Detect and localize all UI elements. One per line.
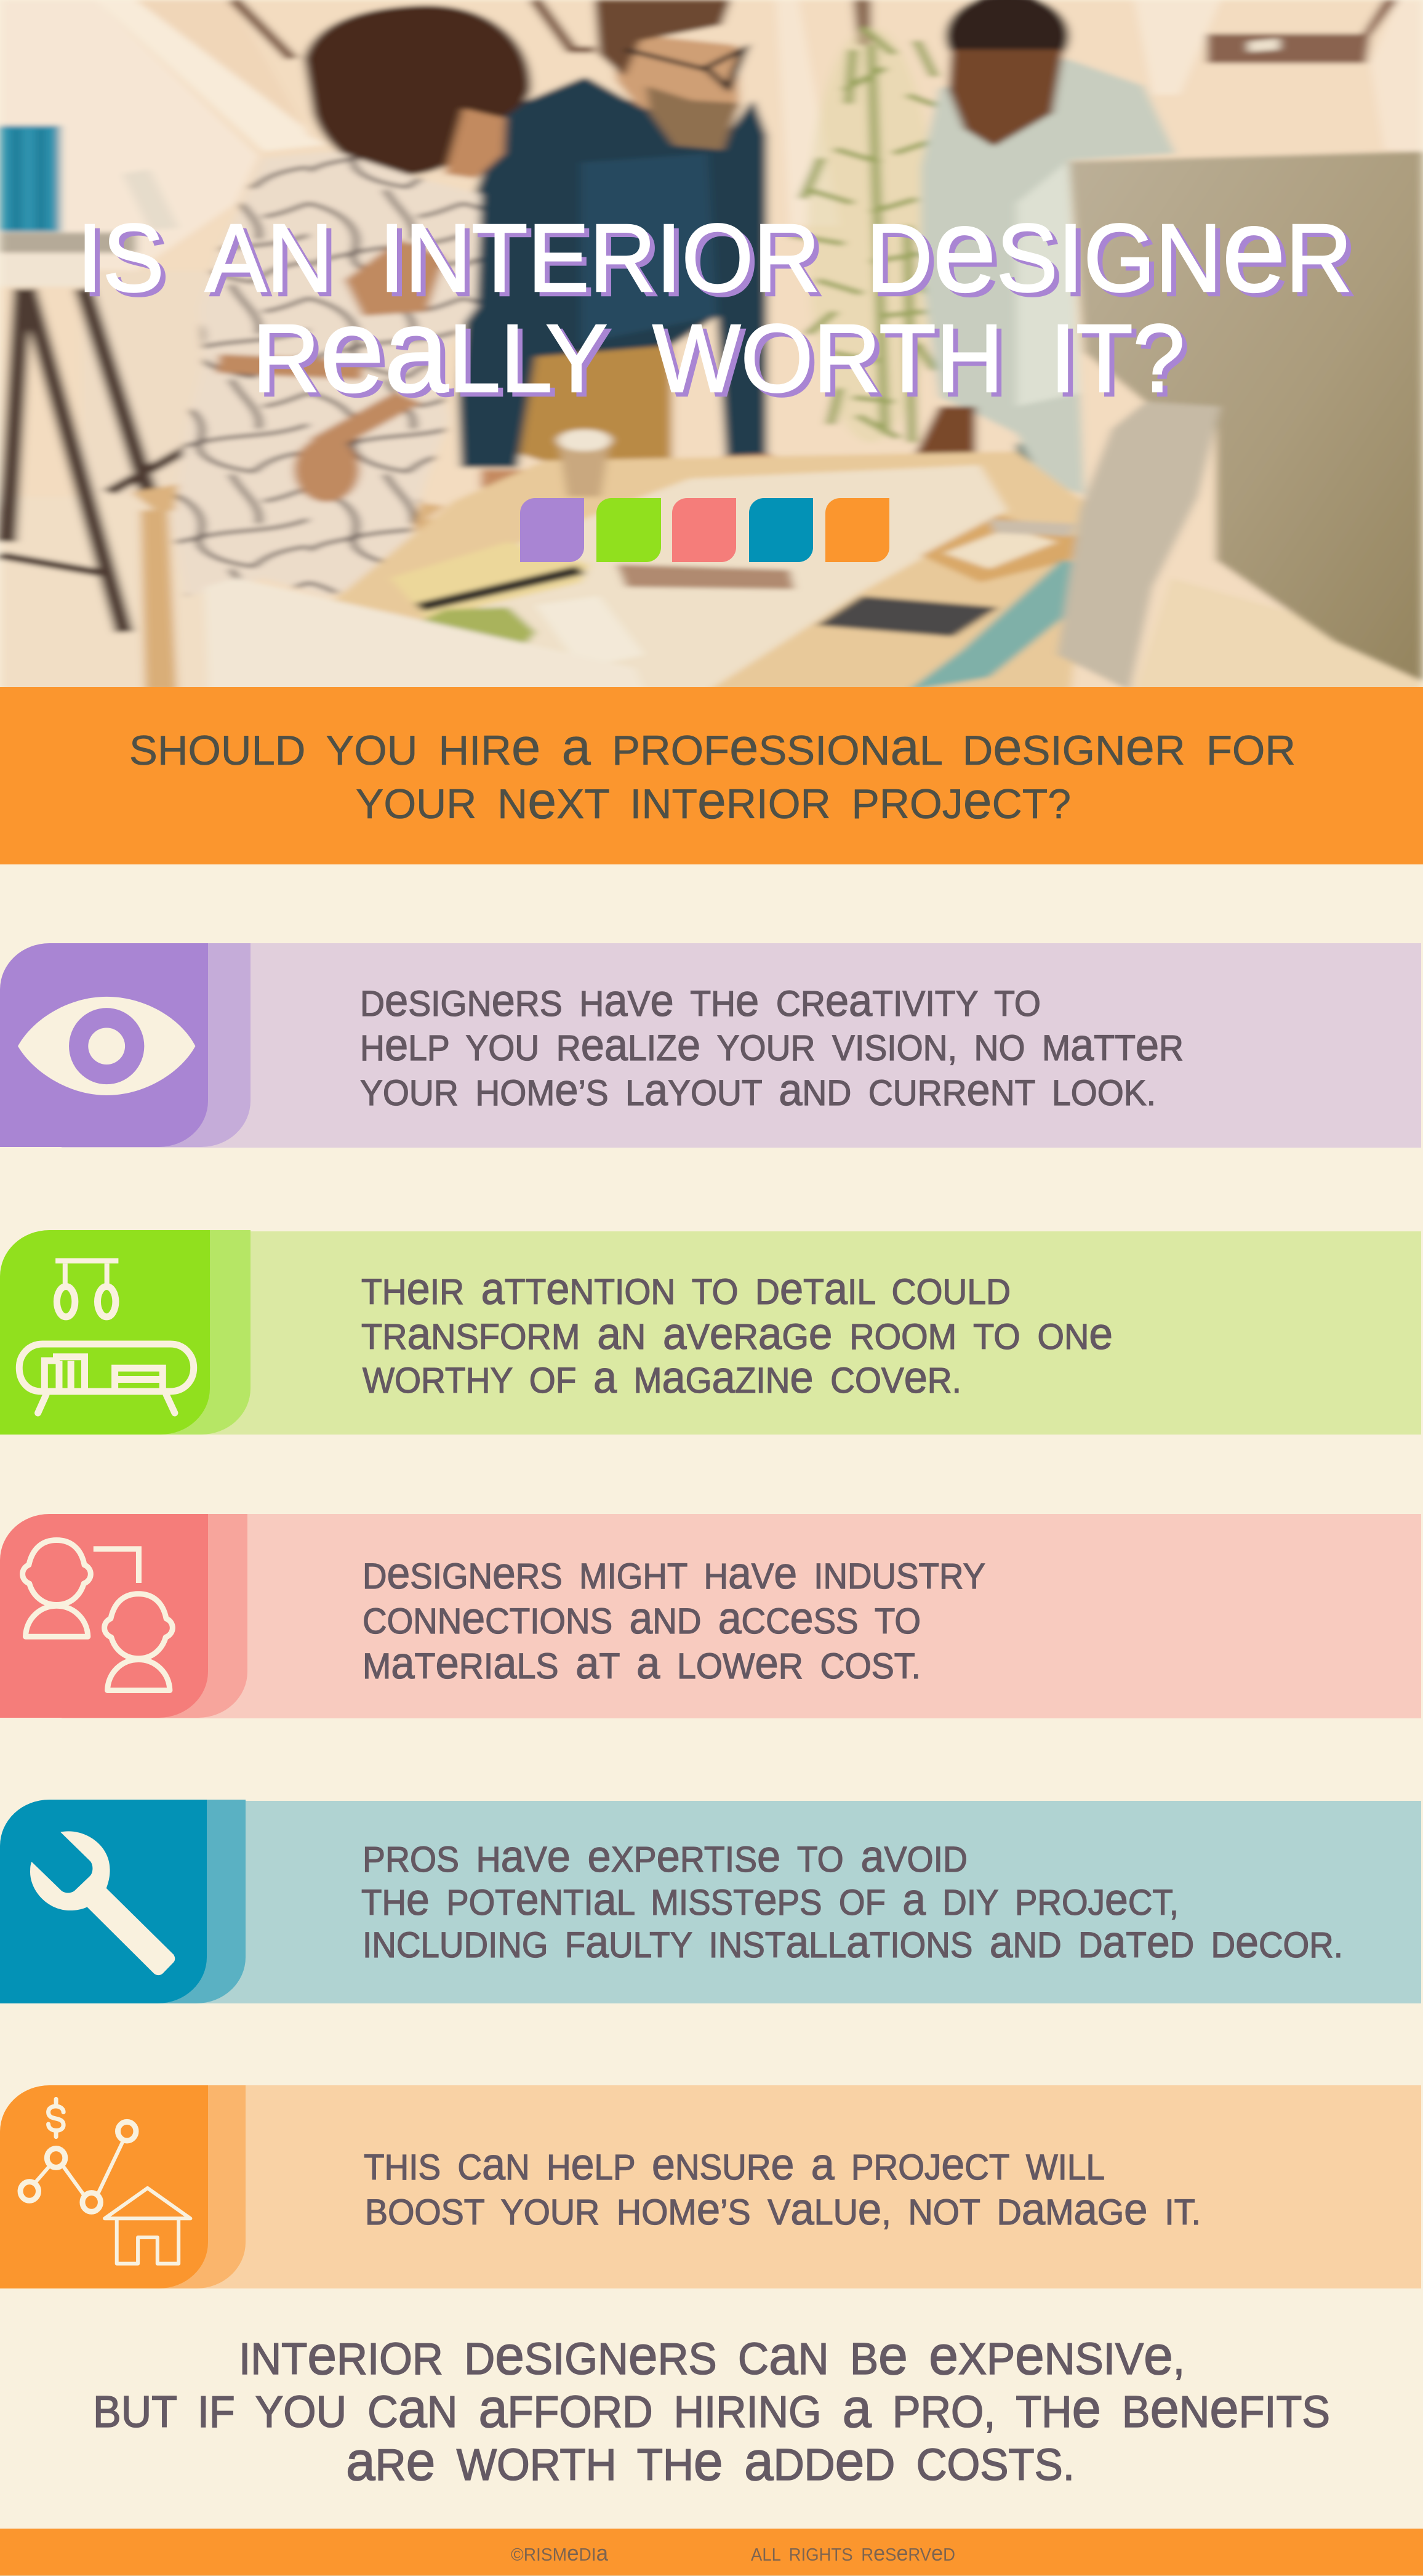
footer: ALL RIGHTS ReSeRVeD xyxy=(751,2540,955,2566)
text: creativity: HeLP YOU ReaLIZe YOUR VISION, NO MaTTeR xyxy=(360,1021,1184,1070)
text: creativity: DeSIGNeRS HaVe THe CReaTIVITY TO xyxy=(360,976,1041,1026)
text: creativity: YOUR HOMe’S LaYOUT aND CURReNT LOOK. xyxy=(360,1066,1156,1115)
text: expertise xyxy=(361,1832,1343,1967)
footer xyxy=(0,2529,1423,2576)
text: expertise: INCLUDING FaULTY INSTaLLaTIONS aND DaTeD DeCOR. xyxy=(363,1918,1343,1967)
icon: lamps and console xyxy=(19,1258,194,1413)
icon: two people connected xyxy=(23,1540,172,1690)
text: attention to detail: THeIR aTTeNTION TO DeTaIL COULD xyxy=(361,1265,1011,1314)
text: attention to detail: WORTHY OF a MaGaZINe COVeR. xyxy=(363,1353,961,1403)
icon: value chart and house xyxy=(20,2099,190,2264)
panel: expertise xyxy=(0,1800,1421,2003)
text: attention to detail: TRaNSFORM aN aVeRaGe ROOM TO ONe xyxy=(361,1310,1113,1359)
photo: three designers around a table xyxy=(0,0,1423,691)
closing statement xyxy=(93,2324,1330,2492)
text: home value: THIS CaN HeLP eNSURe a PROJeCT WILL xyxy=(364,2140,1105,2189)
title: IS AN INTERIOR DeSIGNeR xyxy=(77,183,1352,317)
subtitle banner: SHOULD YOU HIRe a PROFeSSIONaL DeSIGNeR FOR xyxy=(129,718,1296,776)
title: ReaLLY WORTH IT? xyxy=(252,284,1185,417)
subtitle banner xyxy=(0,687,1423,864)
text: industry connections: CONNeCTIONS aND aCCeSS TO xyxy=(363,1594,921,1643)
text: industry connections: MaTeRIaLS aT a LOWeR COST. xyxy=(363,1639,921,1688)
closing statement: aRe WORTH THe aDDeD COSTS. xyxy=(346,2430,1075,2492)
panel: attention to detail xyxy=(0,1230,1421,1435)
text: attention to detail xyxy=(361,1265,1113,1403)
closing statement: BUT IF YOU CaN aFFORD HIRING a PRO, THe BeNeFITS xyxy=(93,2377,1330,2439)
closing statement: INTeRIOR DeSIGNeRS CaN Be eXPeNSIVe, xyxy=(239,2324,1185,2386)
text: home value xyxy=(364,2140,1201,2234)
icon: eye xyxy=(18,997,195,1095)
text: expertise: PROS HaVe eXPeRTISe TO aVOID xyxy=(363,1832,968,1882)
icon: wrench xyxy=(30,1831,175,1975)
title xyxy=(77,183,1352,417)
colour swatches xyxy=(520,498,889,562)
subtitle banner: YOUR NeXT INTeRIOR PROJeCT? xyxy=(356,771,1071,829)
text: expertise: THe POTeNTIaL MISSTePS OF a DIY PROJeCT, xyxy=(361,1875,1179,1925)
panel: industry connections xyxy=(0,1514,1421,1718)
text: home value: BOOST YOUR HOMe’S VaLUe, NOT DaMaGe IT. xyxy=(365,2185,1201,2234)
text: creativity xyxy=(360,976,1184,1115)
footer: ©RISMeDIa xyxy=(511,2540,608,2566)
panel: creativity xyxy=(0,943,1421,1148)
panel: home value xyxy=(0,2085,1421,2288)
text: industry connections xyxy=(363,1549,985,1688)
text: industry connections: DeSIGNeRS MIGHT HaVe INDUSTRY xyxy=(363,1549,985,1598)
